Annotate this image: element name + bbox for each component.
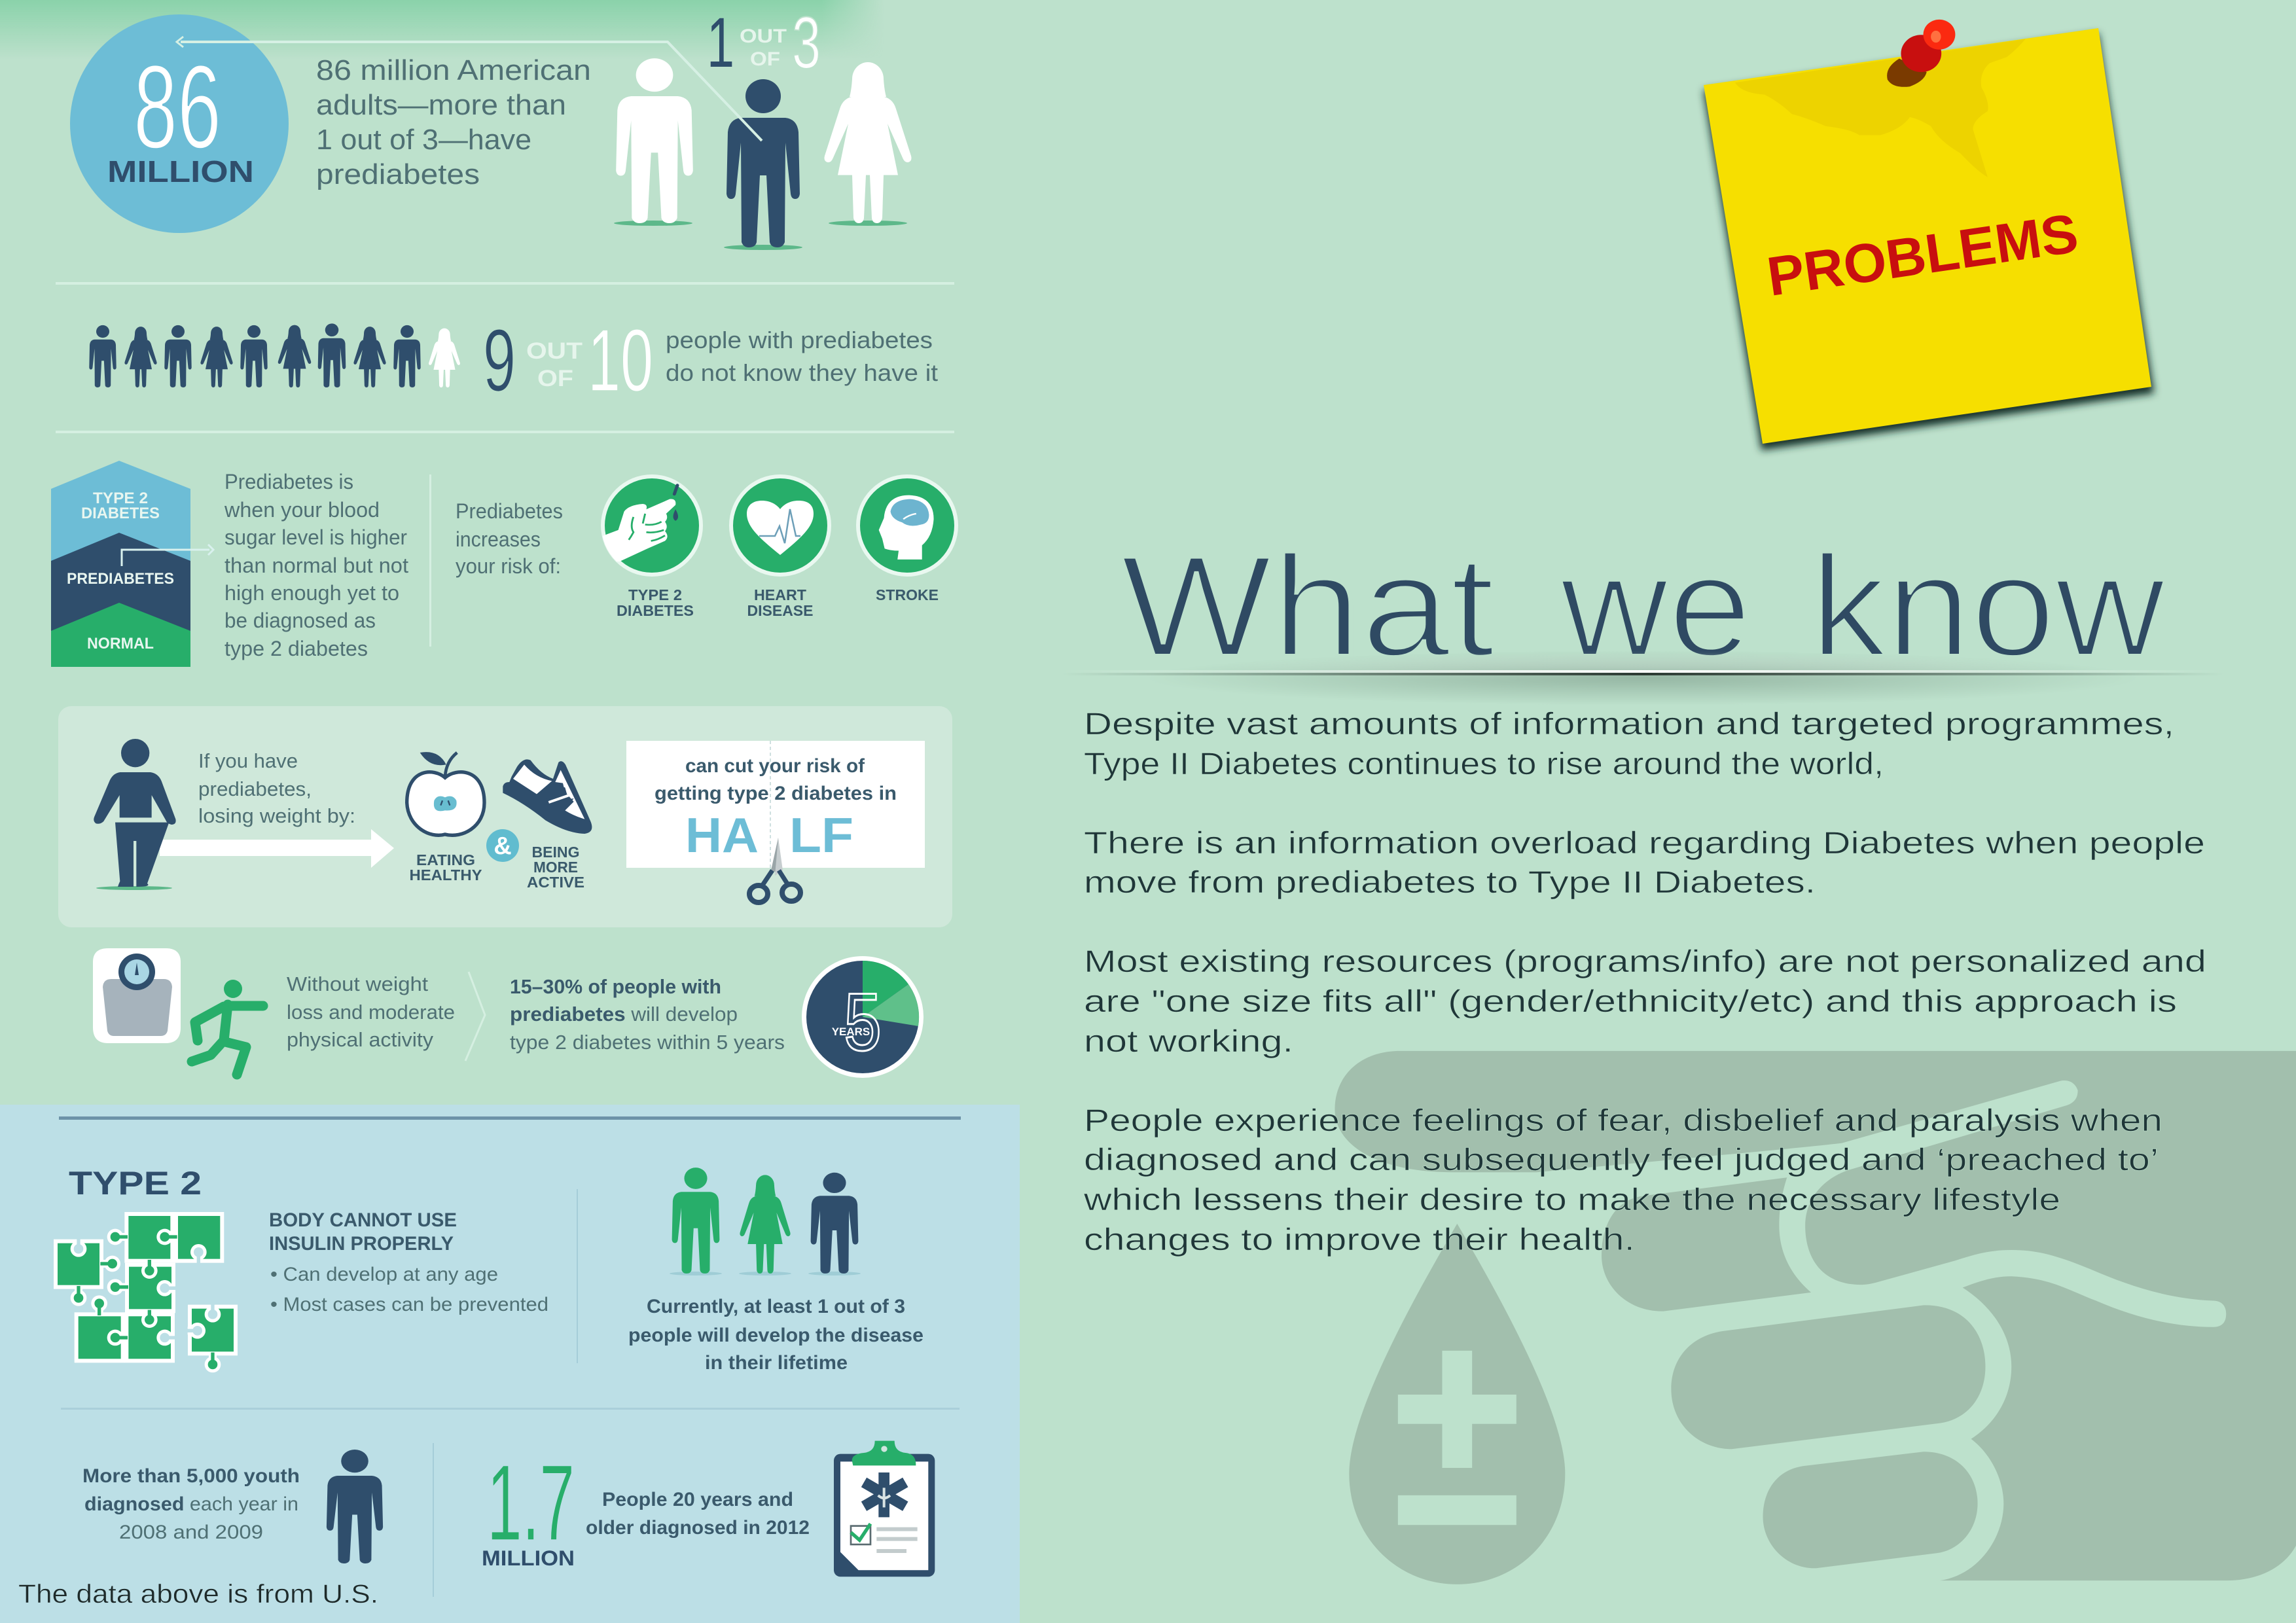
body text: what we know: Despite vast amounts of information and targeted programmes,	[1084, 706, 2174, 741]
text: people 20 years and older: older diagnosed in 2012	[586, 1517, 810, 1539]
text: body cannot use insulin	[269, 1209, 548, 1315]
text: one in three lifetime: in their lifetime	[705, 1352, 848, 1374]
text: if you have prediabetes: prediabetes,	[198, 777, 312, 800]
arrow	[160, 829, 394, 868]
text: 15-30 percent: 15–30% of people with	[510, 975, 721, 998]
note label: PROBLEMS	[1763, 202, 2082, 308]
chart: 5 years pie	[802, 956, 924, 1078]
sticky note: problems	[1704, 20, 2154, 450]
1 out of 3: 1	[707, 3, 734, 82]
stat description	[316, 54, 591, 190]
icon: youth figure	[327, 1450, 383, 1563]
body text: what we know: not working.	[1084, 1024, 1293, 1058]
risk text: increases	[456, 527, 541, 551]
text: one in three lifetime: people will develop the disease	[628, 1325, 924, 1346]
text: body cannot use insulin: • Most cases can be prevented	[270, 1294, 548, 1315]
definition text: type 2 diabetes	[224, 637, 368, 660]
healthy and active labels: HEALTHY	[410, 866, 482, 883]
panel: 86 million	[70, 2, 911, 250]
icon: running shoe	[503, 759, 592, 834]
chart: 5 years pie: YEARS	[832, 1026, 870, 1038]
icon: hand with blood drop	[601, 474, 703, 577]
9 out of 10 numerals: 10	[588, 311, 653, 410]
source note: The data above is from U.S.	[18, 1580, 378, 1609]
row description	[666, 327, 938, 386]
text: body cannot use insulin: BODY CANNOT USE	[269, 1209, 457, 1231]
heading: type 2: TYPE 2	[69, 1165, 202, 1202]
icon: clipboard	[834, 1441, 935, 1577]
stat description: prediabetes	[316, 158, 480, 190]
white box: cut risk in half: LF	[789, 808, 853, 863]
stacked chevrons: TYPE 2	[93, 490, 148, 507]
body text: what we know: changes to improve their health.	[1084, 1222, 1635, 1257]
row description: people with prediabetes	[666, 327, 933, 353]
icon: weighing scale	[93, 948, 181, 1043]
stat description: 1 out of 3—have	[316, 124, 531, 156]
body text: what we know: move from prediabetes to Type II Diabetes.	[1084, 865, 1816, 899]
white box: cut risk in half	[626, 741, 925, 868]
text: 5,000 youth: 2008 and 2009	[119, 1522, 263, 1543]
stat description: 86 million American	[316, 54, 591, 86]
stacked chevrons: DIABETES	[81, 505, 160, 522]
panel: type 2 blue section	[0, 1105, 1020, 1623]
healthy and active labels: MORE	[533, 859, 578, 876]
text: one in three lifetime	[628, 1296, 924, 1374]
text: without weight loss: loss and moderate	[287, 1001, 455, 1024]
9 out of 10 numerals: 9	[483, 311, 516, 410]
1 out of 3: OUT	[740, 26, 787, 47]
text: 5,000 youth: diagnosed each year in	[84, 1493, 298, 1515]
callout arrow	[177, 37, 762, 141]
text: people 20 years and older	[586, 1489, 810, 1539]
risk labels: HEART	[754, 586, 806, 603]
body text: what we know: There is an information overload regarding Diabetes when people	[1084, 825, 2205, 860]
three people: one in three	[670, 1168, 861, 1275]
body text: what we know: are "one size fits all" (gender/ethnicity/etc) and this approach is	[1084, 984, 2177, 1018]
stacked chevrons: PREDIABETES	[67, 570, 174, 588]
definition text: than normal but not	[224, 554, 408, 577]
text: 5,000 youth: More than 5,000 youth	[82, 1465, 300, 1487]
text: 15-30 percent: prediabetes will develop	[510, 1003, 738, 1026]
text: 15-30 percent: type 2 diabetes within 5 years	[510, 1031, 785, 1054]
risk labels: DIABETES	[617, 602, 694, 619]
text: body cannot use insulin: INSULIN PROPERLY	[269, 1233, 454, 1255]
white box: cut risk in half: HA	[685, 808, 759, 863]
definition text: high enough yet to	[224, 581, 399, 605]
risk text: your risk of:	[456, 554, 561, 578]
9 out of 10 numerals: OUT	[526, 338, 583, 364]
background icon: hand and blood drop	[1335, 1051, 2296, 1584]
9 out of 10 numerals	[483, 311, 653, 410]
icon: ampersand: &	[493, 832, 512, 860]
stat: 1.7 million: MILLION	[482, 1546, 575, 1570]
body text: what we know: Most existing resources (programs/info) are not personalized and	[1084, 944, 2206, 978]
row: what is prediabetes	[51, 461, 958, 667]
note paper	[1704, 28, 2151, 444]
body text: what we know: Type II Diabetes continues to rise around the world,	[1084, 746, 1884, 781]
icon: apple	[407, 752, 484, 835]
title: what we know: we	[1560, 526, 1751, 687]
1 out of 3	[707, 2, 821, 84]
definition text	[224, 470, 408, 660]
pin shadow and push pin	[1735, 20, 2026, 177]
title: what we know	[1121, 526, 2166, 687]
title: what we know: know	[1810, 526, 2166, 687]
row: 9 out of 10	[89, 311, 938, 410]
stat circle: MILLION	[107, 154, 254, 188]
healthy and active labels: BEING	[531, 844, 580, 861]
body text: what we know: diagnosed and can subsequently feel judged and ‘preached to’	[1084, 1142, 2159, 1177]
stacked chevrons	[51, 461, 213, 667]
risk labels: TYPE 2	[628, 586, 682, 603]
body text: what we know	[1083, 706, 2206, 1257]
text: body cannot use insulin: • Can develop at any age	[270, 1264, 498, 1285]
icon: ampersand	[486, 829, 519, 862]
body text: what we know: People experience feelings of fear, disbelief and paralysis when	[1084, 1103, 2162, 1137]
text: without weight loss: physical activity	[287, 1028, 434, 1051]
chart: 5 years pie: 5	[844, 977, 882, 1068]
icon: green runner	[192, 980, 263, 1075]
text: if you have prediabetes	[198, 749, 355, 827]
panel: losing weight	[58, 706, 952, 927]
icon: person losing weight	[94, 739, 176, 890]
text: without weight loss: Without weight	[287, 972, 428, 995]
1 out of 3: OF	[750, 48, 780, 70]
text: if you have prediabetes: If you have	[198, 749, 298, 772]
icon: scissors	[749, 838, 800, 902]
text: one in three lifetime: Currently, at least 1 out of 3	[647, 1296, 905, 1317]
title: what we know: What	[1121, 526, 1495, 687]
row description: do not know they have it	[666, 359, 938, 386]
top green gradient band	[0, 0, 874, 50]
stat: 1.7 million: 1.7	[487, 1442, 575, 1563]
text: 5,000 youth	[82, 1465, 300, 1543]
text: 15-30 percent	[510, 975, 785, 1054]
body text: what we know: which lessens their desire to make the necessary lifestyle	[1083, 1182, 2060, 1217]
title underline with shadow	[1062, 651, 2224, 705]
definition text: Prediabetes is	[224, 470, 353, 493]
text: if you have prediabetes: losing weight by:	[198, 804, 355, 827]
risk text: Prediabetes	[456, 499, 563, 523]
stat circle	[70, 14, 289, 233]
row: without weight loss	[93, 948, 924, 1078]
risk text	[456, 499, 563, 578]
definition text: when your blood	[224, 498, 380, 522]
ten people pictogram	[89, 323, 460, 387]
icon: head with brain	[856, 474, 958, 577]
text: people 20 years and older: People 20 years and	[602, 1489, 793, 1510]
three people	[614, 58, 911, 250]
text: without weight loss	[287, 972, 455, 1051]
stat: 1.7 million	[482, 1442, 575, 1570]
1 out of 3: 3	[792, 2, 821, 84]
definition text: be diagnosed as	[224, 609, 376, 632]
healthy and active labels: EATING	[416, 851, 475, 868]
risk labels: STROKE	[876, 586, 939, 603]
stat description: adults—more than	[316, 89, 566, 121]
9 out of 10 numerals: OF	[537, 366, 573, 391]
note shadow	[1704, 33, 2154, 450]
healthy and active labels: ACTIVE	[527, 874, 584, 891]
definition text: sugar level is higher	[224, 526, 407, 549]
white box: cut risk in half: getting type 2 diabetes in	[655, 783, 897, 804]
stat circle: 86	[134, 40, 221, 173]
risk labels: DISEASE	[747, 602, 813, 619]
icon: heart	[729, 474, 831, 577]
stacked chevrons: NORMAL	[87, 635, 154, 652]
healthy and active labels	[410, 844, 584, 891]
risk labels	[617, 586, 939, 619]
icon: puzzle pieces	[56, 1214, 236, 1372]
white box: cut risk in half: can cut your risk of	[685, 755, 865, 777]
